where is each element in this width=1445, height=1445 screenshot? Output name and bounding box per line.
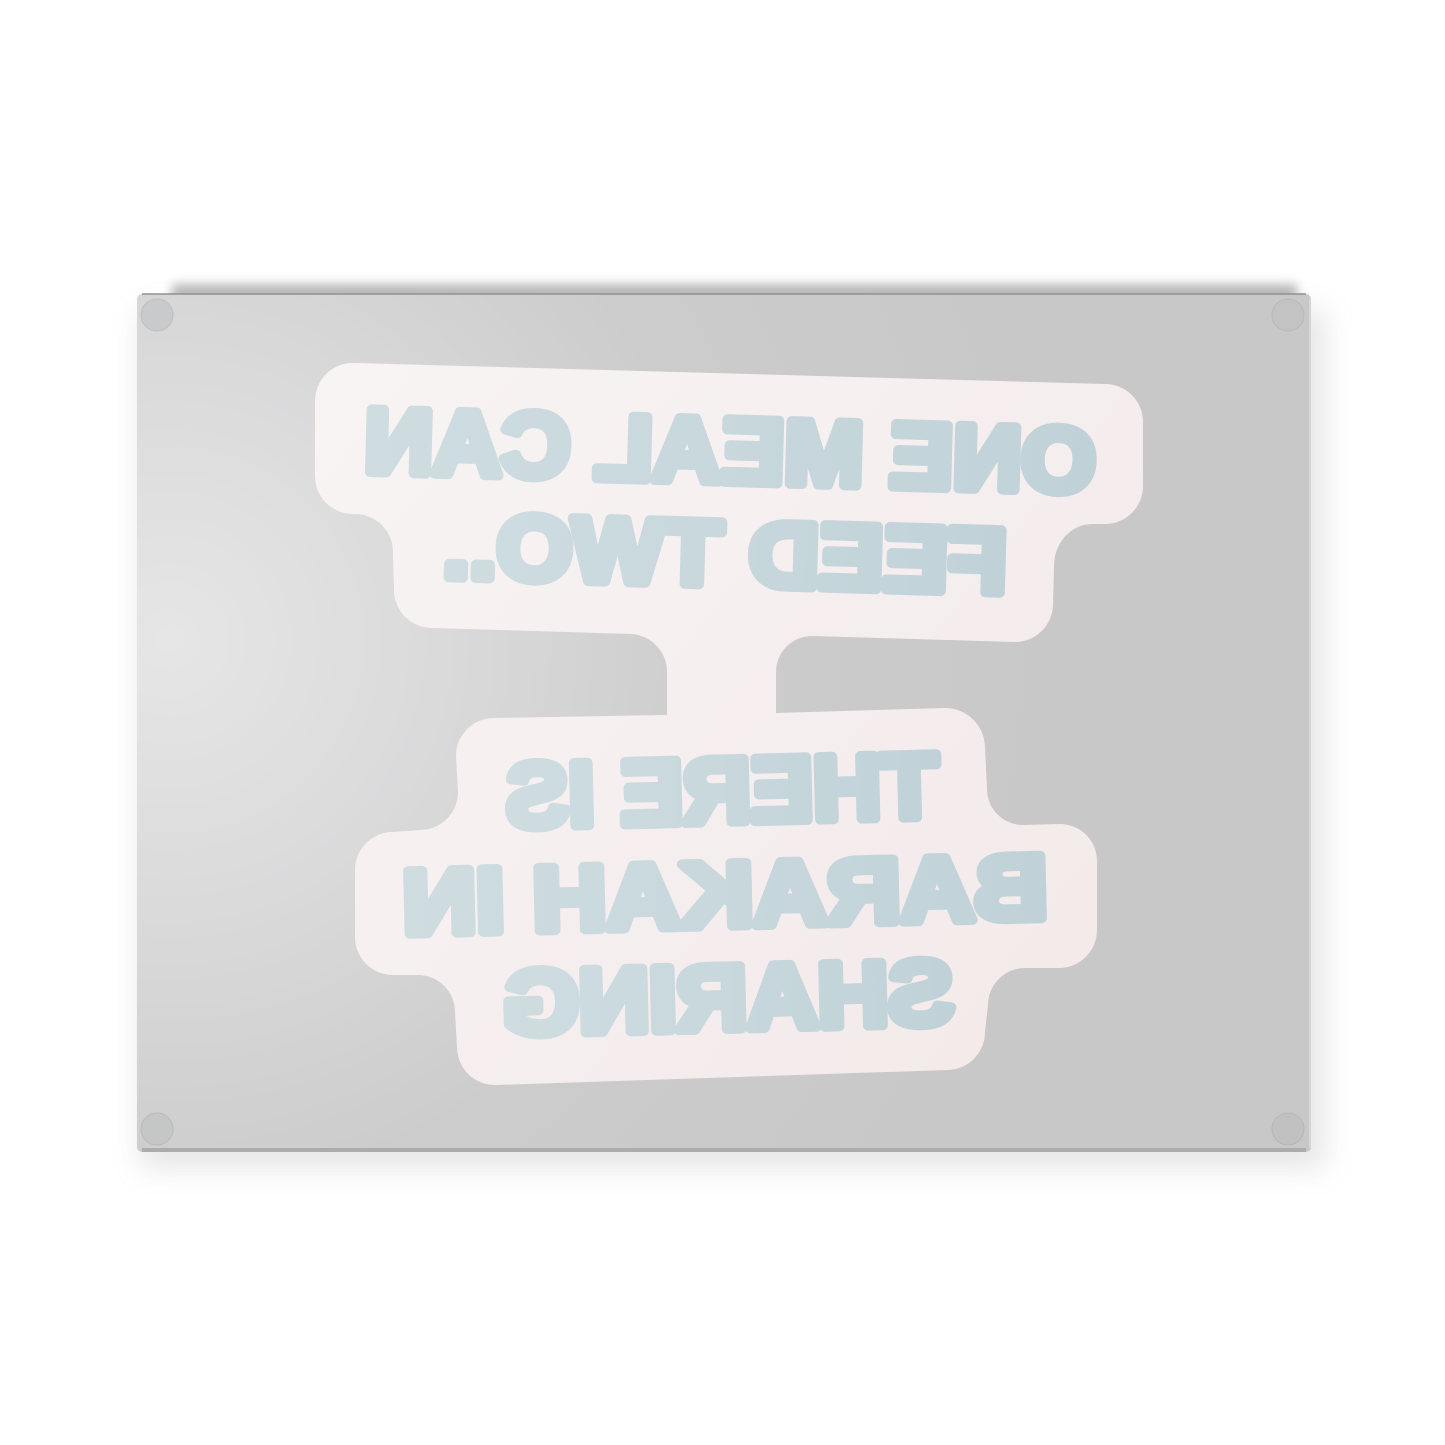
screw: bottom right bbox=[1272, 1113, 1304, 1145]
line: ONE MEAL CAN: ONE MEAL CAN bbox=[363, 391, 1097, 512]
line: BARAKAH IN: BARAKAH IN bbox=[401, 837, 1049, 954]
text block: mirrored slogan bbox=[363, 391, 1097, 1054]
line: FEED TWO..: FEED TWO.. bbox=[442, 496, 1008, 613]
sticker: sign shape bbox=[315, 363, 1143, 1085]
screw: top right bbox=[1272, 299, 1304, 331]
board shadow bbox=[140, 284, 1325, 1168]
line: SHARING: SHARING bbox=[501, 943, 955, 1054]
screw: bottom left bbox=[141, 1113, 173, 1145]
glass board bbox=[137, 293, 1311, 1152]
screw: top left bbox=[141, 299, 173, 331]
line: THERE IS: THERE IS bbox=[505, 736, 939, 847]
